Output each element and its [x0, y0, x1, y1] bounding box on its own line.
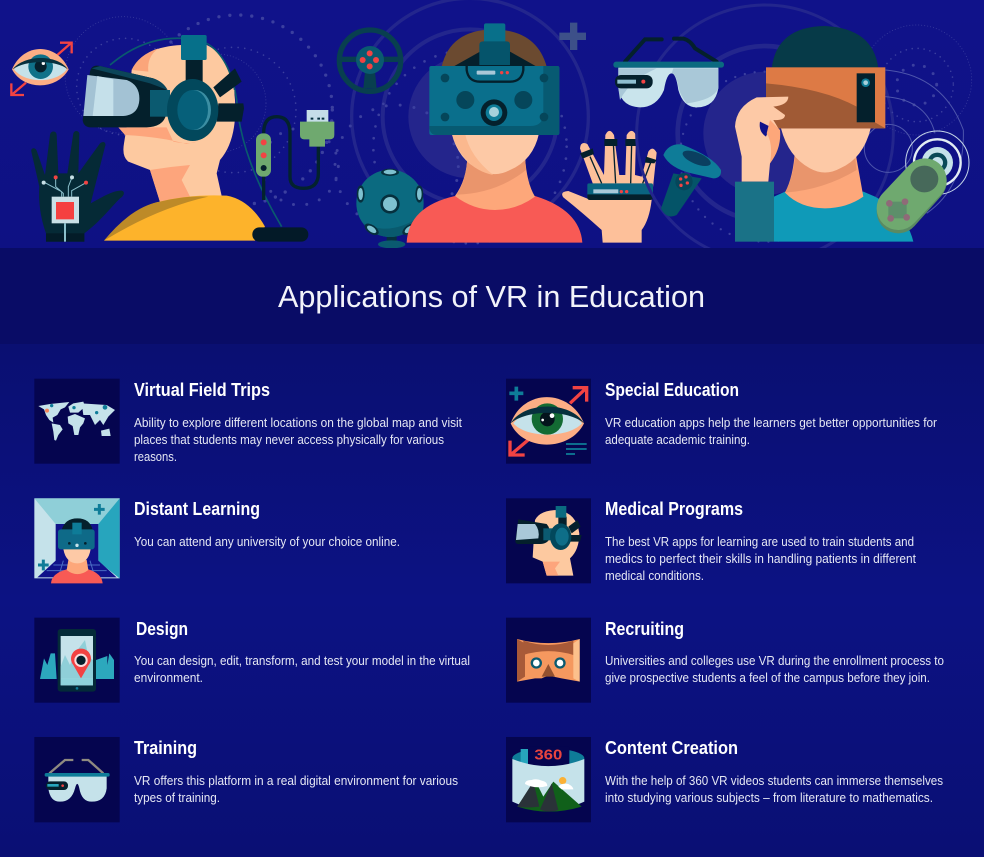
page background [0, 344, 984, 857]
item: Medical Programs: medical conditions. [605, 569, 704, 583]
item: Special Education [506, 379, 937, 464]
hero illustration [0, 0, 984, 262]
icon: 360 video panorama: 360 [534, 747, 562, 764]
icon: head with VR headset [506, 498, 591, 583]
VR headset side view [83, 35, 244, 141]
title band [0, 248, 984, 344]
item: Virtual Field Trips: Ability to explore different locations on the global map and visit [134, 416, 462, 430]
item: Medical Programs: Medical Programs [605, 499, 743, 519]
icon: phone with map pin [34, 618, 120, 703]
item: Design: You can design, edit, transform, and test your model in the virtual [134, 654, 470, 668]
icon: VR goggles [613, 39, 724, 107]
item: Content Creation [506, 737, 943, 822]
right VR figure [613, 5, 972, 262]
left VR figure [11, 15, 338, 242]
item: Special Education: adequate academic training. [605, 433, 750, 447]
item: Virtual Field Trips [34, 379, 462, 464]
person with headset [407, 23, 582, 243]
item: Virtual Field Trips: Virtual Field Trips [134, 380, 270, 400]
item: Content Creation: Content Creation [605, 738, 738, 758]
hand with finger sensors [562, 131, 657, 243]
item: Medical Programs: medics to perfect their skills in handling patients in different [605, 552, 916, 566]
item: Distant Learning: You can attend any university of your choice online. [134, 535, 400, 549]
item: Recruiting [506, 618, 944, 703]
item: Recruiting: Universities and colleges use VR during the enrollment process to [605, 654, 944, 668]
item: Design [34, 618, 470, 703]
item: Special Education: VR education apps help the learners get better opportunities for [605, 416, 937, 430]
item: Content Creation: into studying various subjects – from literature to mathematics. [605, 791, 933, 805]
icon: eye with arrows [506, 379, 591, 464]
item: Training: Training [134, 738, 197, 758]
icon: world map [34, 379, 120, 464]
title: Applications of VR in Education [278, 279, 705, 314]
icon: 360 video panorama [506, 737, 591, 822]
icon: person in virtual room [34, 498, 120, 583]
item: Virtual Field Trips: reasons. [134, 450, 177, 464]
head [123, 45, 235, 202]
item: Recruiting: give prospective students a feel of the campus before they join. [605, 671, 930, 685]
item: Design: environment. [134, 671, 203, 685]
icon: VR glove hand [31, 131, 124, 242]
item: Training: types of training. [134, 791, 220, 805]
icon: green haptic device [886, 131, 969, 222]
item: Medical Programs [506, 498, 916, 583]
icon: VR glasses [34, 737, 120, 822]
centre VR figure [335, 0, 657, 248]
shirt [104, 195, 265, 241]
icon: plus [559, 23, 586, 50]
item: Special Education: Special Education [605, 380, 739, 400]
item: Training: VR offers this platform in a real digital environment for various [134, 774, 458, 788]
item: Distant Learning [34, 498, 400, 583]
item: Content Creation: With the help of 360 VR videos students can immerse themselves [605, 774, 943, 788]
cable and base [110, 38, 282, 227]
item: Design: Design [136, 619, 188, 639]
item: Recruiting: Recruiting [605, 619, 684, 639]
icon: steering wheel [339, 30, 401, 91]
icon: cardboard viewer [506, 618, 591, 703]
icon: 360 camera sphere [356, 169, 424, 248]
item: Medical Programs: The best VR apps for learning are used to train students and [605, 535, 914, 549]
icon: VR controller [661, 144, 721, 216]
person with cardboard viewer [735, 26, 913, 242]
item: Virtual Field Trips: places that students may never access physically for various [134, 433, 444, 447]
remote and USB plug [256, 110, 334, 200]
icon: eye with arrows [11, 43, 72, 95]
item: Training [34, 737, 458, 822]
item: Distant Learning: Distant Learning [134, 499, 260, 519]
